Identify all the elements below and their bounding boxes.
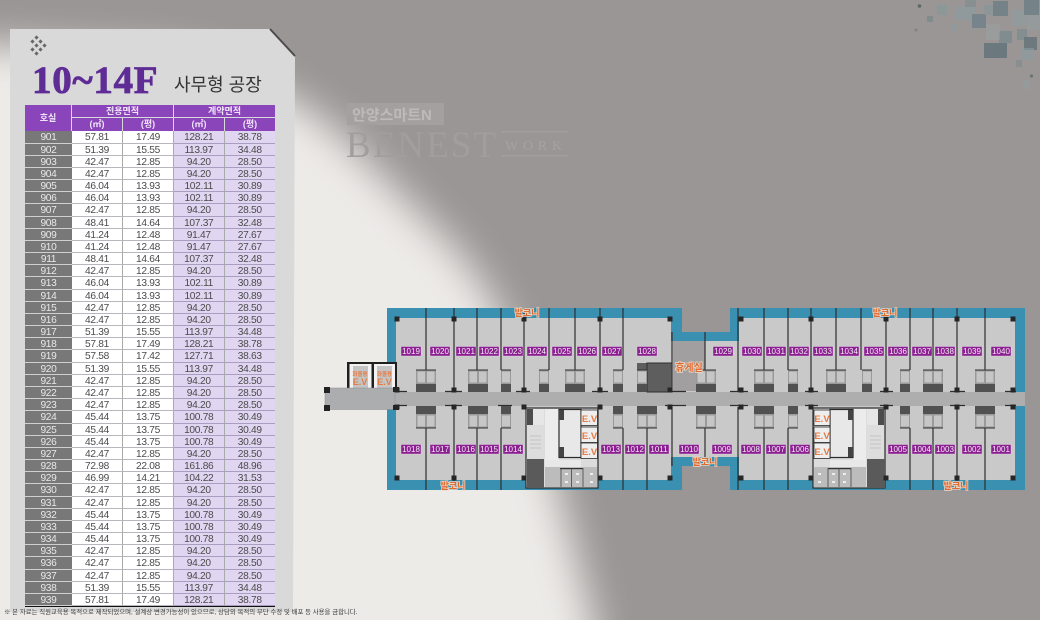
table rows: 935 xyxy=(40,546,57,557)
table rows: 927 xyxy=(40,449,57,460)
table rows: 46.04 xyxy=(85,278,109,289)
table rows: 921 xyxy=(40,376,57,387)
table rows: 12.85 xyxy=(136,169,160,180)
unit number badges upper: 1022 xyxy=(480,347,498,356)
unit number badges lower: 1010 xyxy=(680,445,698,454)
table rows: 17.49 xyxy=(136,339,160,350)
table rows: 28.50 xyxy=(238,205,262,216)
table rows: 46.04 xyxy=(85,193,109,204)
table rows: 42.47 xyxy=(85,400,109,411)
table rows: 28.50 xyxy=(238,485,262,496)
table rows: 161.86 xyxy=(184,461,213,472)
table rows: 42.47 xyxy=(85,315,109,326)
table rows: 934 xyxy=(40,534,57,545)
table rows: 22.08 xyxy=(136,461,160,472)
unit number badges lower: 1013 xyxy=(602,445,620,454)
table rows: 12.85 xyxy=(136,449,160,460)
table rows: 41.24 xyxy=(85,242,109,253)
table rows: 924 xyxy=(40,412,57,423)
core left xyxy=(526,408,598,488)
table rows: 30.89 xyxy=(238,278,262,289)
table rows: 12.48 xyxy=(136,242,160,253)
table rows: 902 xyxy=(40,145,57,156)
table rows: 12.85 xyxy=(136,303,160,314)
table rows: 94.20 xyxy=(187,449,211,460)
table rows: 28.50 xyxy=(238,266,262,277)
table rows: 94.20 xyxy=(187,485,211,496)
core right elevators: E.V xyxy=(814,447,830,458)
table rows: 57.81 xyxy=(85,339,109,350)
table rows: 929 xyxy=(40,473,57,484)
table rows: 12.85 xyxy=(136,400,160,411)
table rows: 34.48 xyxy=(238,583,262,594)
table rows: 100.78 xyxy=(184,437,213,448)
table rows: 94.20 xyxy=(187,558,211,569)
table rows: 30.89 xyxy=(238,291,262,302)
table rows: 906 xyxy=(40,193,57,204)
unit number badges upper: 1020 xyxy=(431,347,449,356)
table rows: 94.20 xyxy=(187,315,211,326)
unit number badges lower: 1015 xyxy=(480,445,498,454)
table rows: 30.49 xyxy=(238,534,262,545)
table rows: 34.48 xyxy=(238,145,262,156)
table header: 전용면적 xyxy=(106,106,139,116)
table rows: 94.20 xyxy=(187,498,211,509)
freight elevator block: E.V xyxy=(377,377,392,387)
table rows: 17.49 xyxy=(136,595,160,606)
table rows: 932 xyxy=(40,510,57,521)
panel: unit area table background xyxy=(10,29,295,612)
table rows: 94.20 xyxy=(187,169,211,180)
title: 10~14F xyxy=(32,59,158,102)
balcony and rest area labels: 발코니 xyxy=(944,480,968,491)
table rows: 30.49 xyxy=(238,437,262,448)
table rows: 46.99 xyxy=(85,473,109,484)
unit number badges upper: 1037 xyxy=(913,347,931,356)
table rows: 102.11 xyxy=(184,278,213,289)
unit number badges upper: 1019 xyxy=(402,347,420,356)
table rows: 94.20 xyxy=(187,157,211,168)
table rows: 42.47 xyxy=(85,303,109,314)
table rows: 45.44 xyxy=(85,510,109,521)
table rows: 939 xyxy=(40,595,57,606)
table rows: 113.97 xyxy=(184,145,213,156)
watermark logo xyxy=(346,103,568,166)
table rows: 938 xyxy=(40,583,57,594)
watermark logo: 안양스마트N xyxy=(352,107,432,124)
table rows: 104.22 xyxy=(184,473,213,484)
core left elevators: E.V xyxy=(582,431,598,442)
unit area table xyxy=(25,105,275,607)
partition walls xyxy=(397,308,1016,490)
unit number badges lower: 1003 xyxy=(936,445,954,454)
unit number badges upper: 1025 xyxy=(553,347,571,356)
table rows: 42.47 xyxy=(85,388,109,399)
freight elevator block xyxy=(324,362,399,411)
table rows: 918 xyxy=(40,339,57,350)
table rows: 42.47 xyxy=(85,449,109,460)
table rows: 27.67 xyxy=(238,242,262,253)
table rows: 13.93 xyxy=(136,193,160,204)
balcony and rest area labels: 발코니 xyxy=(515,307,539,318)
table rows: 28.50 xyxy=(238,315,262,326)
unit number badges upper: 1028 xyxy=(638,347,656,356)
table rows: 51.39 xyxy=(85,327,109,338)
table rows: 34.48 xyxy=(238,327,262,338)
table rows: 42.47 xyxy=(85,376,109,387)
table rows: 936 xyxy=(40,558,57,569)
table rows: 57.58 xyxy=(85,351,109,362)
table rows: 28.50 xyxy=(238,498,262,509)
table header: (㎡) xyxy=(192,119,206,129)
table rows: 34.48 xyxy=(238,364,262,375)
core left elevators xyxy=(581,410,598,458)
table rows: 17.42 xyxy=(136,351,160,362)
unit number badges upper: 1023 xyxy=(504,347,522,356)
balcony and rest area labels: 발코니 xyxy=(441,480,465,491)
table rows xyxy=(25,131,275,607)
table rows: 917 xyxy=(40,327,57,338)
table header xyxy=(25,105,275,131)
table rows: 127.71 xyxy=(184,351,213,362)
unit number badges lower: 1004 xyxy=(913,445,931,454)
unit number badges upper: 1038 xyxy=(936,347,954,356)
balcony and rest area labels xyxy=(441,307,968,491)
table rows: 107.37 xyxy=(184,218,213,229)
table rows: 94.20 xyxy=(187,571,211,582)
unit number badges lower: 1002 xyxy=(963,445,981,454)
table rows: 915 xyxy=(40,303,57,314)
freight elevator block: 화물용 xyxy=(352,370,368,378)
table rows: 922 xyxy=(40,388,57,399)
table rows: 102.11 xyxy=(184,193,213,204)
table rows: 48.41 xyxy=(85,218,109,229)
table rows: 15.55 xyxy=(136,327,160,338)
table rows: 94.20 xyxy=(187,400,211,411)
unit number badges upper: 1033 xyxy=(814,347,832,356)
table rows: 909 xyxy=(40,230,57,241)
table rows: 72.98 xyxy=(85,461,109,472)
table rows: 904 xyxy=(40,169,57,180)
pixel squares top right xyxy=(914,0,1040,89)
table rows: 12.85 xyxy=(136,315,160,326)
table rows: 38.78 xyxy=(238,132,262,143)
unit number badges lower: 1014 xyxy=(504,445,522,454)
table rows: 48.96 xyxy=(238,461,262,472)
table rows: 12.85 xyxy=(136,266,160,277)
table rows: 113.97 xyxy=(184,327,213,338)
table rows: 12.85 xyxy=(136,376,160,387)
table rows: 31.53 xyxy=(238,473,262,484)
table rows: 13.93 xyxy=(136,291,160,302)
table rows: 920 xyxy=(40,364,57,375)
table rows: 48.41 xyxy=(85,254,109,265)
unit number badges upper xyxy=(401,346,1011,356)
table rows: 910 xyxy=(40,242,57,253)
table rows: 30.49 xyxy=(238,412,262,423)
table rows: 12.85 xyxy=(136,571,160,582)
table rows: 42.47 xyxy=(85,498,109,509)
table rows: 914 xyxy=(40,291,57,302)
unit number badges upper: 1039 xyxy=(963,347,981,356)
table rows: 42.47 xyxy=(85,546,109,557)
balcony outline xyxy=(387,308,1025,490)
unit number badges lower: 1001 xyxy=(992,445,1010,454)
table rows: 42.47 xyxy=(85,157,109,168)
table rows: 45.44 xyxy=(85,534,109,545)
table rows: 13.75 xyxy=(136,437,160,448)
table rows: 13.75 xyxy=(136,534,160,545)
table rows: 102.11 xyxy=(184,291,213,302)
unit number badges lower: 1005 xyxy=(889,445,907,454)
icon: diamond pixel mark xyxy=(30,36,46,56)
balcony and rest area labels: 발코니 xyxy=(693,456,717,467)
watermark logo: WORK xyxy=(505,139,562,154)
table rows: 12.85 xyxy=(136,388,160,399)
rest area room xyxy=(673,341,705,391)
table rows: 916 xyxy=(40,315,57,326)
table rows: 15.55 xyxy=(136,145,160,156)
table rows: 14.64 xyxy=(136,254,160,265)
table rows: 128.21 xyxy=(184,595,213,606)
core right xyxy=(813,408,885,488)
table rows: 13.75 xyxy=(136,425,160,436)
table rows: 14.64 xyxy=(136,218,160,229)
table rows: 12.85 xyxy=(136,498,160,509)
table rows: 57.81 xyxy=(85,132,109,143)
balcony and rest area labels: 휴게실 xyxy=(675,361,703,374)
table rows: 905 xyxy=(40,181,57,192)
table rows: 28.50 xyxy=(238,400,262,411)
table rows: 45.44 xyxy=(85,522,109,533)
table rows: 28.50 xyxy=(238,546,262,557)
table rows: 13.93 xyxy=(136,181,160,192)
table rows: 42.47 xyxy=(85,266,109,277)
panel corner fold xyxy=(269,28,296,57)
table rows: 12.85 xyxy=(136,485,160,496)
unit number badges lower: 1017 xyxy=(431,445,449,454)
unit number badges lower: 1016 xyxy=(457,445,475,454)
table rows: 13.93 xyxy=(136,278,160,289)
table rows: 128.21 xyxy=(184,339,213,350)
table rows: 38.63 xyxy=(238,351,262,362)
table rows: 15.55 xyxy=(136,364,160,375)
table rows: 38.78 xyxy=(238,595,262,606)
table rows: 28.50 xyxy=(238,376,262,387)
core right elevators xyxy=(814,410,830,458)
freight elevator block: E.V xyxy=(353,377,367,387)
subtitle: 사무형 공장 xyxy=(174,75,262,95)
core left elevators: E.V xyxy=(582,447,598,458)
table rows: 32.48 xyxy=(238,218,262,229)
table rows: 12.85 xyxy=(136,546,160,557)
unit number badges lower: 1018 xyxy=(402,445,420,454)
table header: (㎡) xyxy=(90,119,104,129)
core right elevators: E.V xyxy=(814,431,830,442)
table rows: 51.39 xyxy=(85,145,109,156)
table rows: 45.44 xyxy=(85,437,109,448)
table header: (평) xyxy=(141,119,155,129)
table rows: 930 xyxy=(40,485,57,496)
unit number badges lower: 1006 xyxy=(791,445,809,454)
table rows: 42.47 xyxy=(85,558,109,569)
table rows: 913 xyxy=(40,278,57,289)
corridor xyxy=(393,392,1025,406)
table rows: 91.47 xyxy=(187,230,211,241)
table header: 호실 xyxy=(40,113,56,123)
table rows: 46.04 xyxy=(85,291,109,302)
table rows: 94.20 xyxy=(187,376,211,387)
table rows: 42.47 xyxy=(85,571,109,582)
table rows: 901 xyxy=(40,132,57,143)
table rows: 30.49 xyxy=(238,522,262,533)
table rows: 32.48 xyxy=(238,254,262,265)
table rows: 12.85 xyxy=(136,558,160,569)
table rows: 51.39 xyxy=(85,364,109,375)
floor area xyxy=(396,318,1015,480)
unit number badges lower: 1007 xyxy=(767,445,785,454)
unit number badges upper: 1035 xyxy=(865,347,883,356)
table rows: 91.47 xyxy=(187,242,211,253)
unit number badges lower: 1011 xyxy=(650,445,668,454)
table header: (평) xyxy=(243,119,257,129)
table rows: 30.49 xyxy=(238,425,262,436)
table rows: 102.11 xyxy=(184,181,213,192)
table rows: 51.39 xyxy=(85,583,109,594)
table rows: 912 xyxy=(40,266,57,277)
table rows: 27.67 xyxy=(238,230,262,241)
table rows: 100.78 xyxy=(184,510,213,521)
table rows: 928 xyxy=(40,461,57,472)
table rows: 923 xyxy=(40,400,57,411)
freight elevator block: 화물용 xyxy=(377,370,392,378)
table rows: 28.50 xyxy=(238,449,262,460)
table rows: 100.78 xyxy=(184,522,213,533)
table rows: 911 xyxy=(41,254,56,265)
table rows: 12.48 xyxy=(136,230,160,241)
storage room beside 1028 xyxy=(637,363,672,392)
table rows: 30.89 xyxy=(238,181,262,192)
unit number badges upper: 1029 xyxy=(714,347,732,356)
table rows: 45.44 xyxy=(85,412,109,423)
table rows: 57.81 xyxy=(85,595,109,606)
table rows: 28.50 xyxy=(238,303,262,314)
table rows: 94.20 xyxy=(187,266,211,277)
table rows: 28.50 xyxy=(238,558,262,569)
table rows: 42.47 xyxy=(85,485,109,496)
table rows: 107.37 xyxy=(184,254,213,265)
table rows: 933 xyxy=(40,522,57,533)
table rows: 38.78 xyxy=(238,339,262,350)
table rows: 931 xyxy=(40,498,57,509)
core right elevators: E.V xyxy=(814,414,830,425)
table rows: 925 xyxy=(40,425,57,436)
table rows: 100.78 xyxy=(184,425,213,436)
table rows: 17.49 xyxy=(136,132,160,143)
footnote: ※ 본 자료는 직원교육용 목적으로 제작되었으며, 설계상 변경가능성이 있으므로, 상담외 목적의 무단 수정 및 배포 등 사용을 금합니다. xyxy=(4,609,358,616)
table rows: 13.75 xyxy=(136,510,160,521)
unit number badges upper: 1040 xyxy=(992,347,1010,356)
table rows: 94.20 xyxy=(187,388,211,399)
table rows: 14.21 xyxy=(136,473,160,484)
table rows: 12.85 xyxy=(136,157,160,168)
table rows: 937 xyxy=(40,571,57,582)
table rows: 113.97 xyxy=(184,364,213,375)
table rows: 28.50 xyxy=(238,388,262,399)
unit number badges lower: 1009 xyxy=(713,445,731,454)
table rows: 28.50 xyxy=(238,571,262,582)
table rows: 46.04 xyxy=(85,181,109,192)
table header: 계약면적 xyxy=(208,106,241,116)
table rows: 908 xyxy=(40,218,57,229)
table rows: 28.50 xyxy=(238,169,262,180)
unit number badges upper: 1030 xyxy=(743,347,761,356)
table rows: 30.89 xyxy=(238,193,262,204)
table rows: 919 xyxy=(40,351,57,362)
unit number badges upper: 1021 xyxy=(457,347,475,356)
table rows: 94.20 xyxy=(187,546,211,557)
table rows: 13.75 xyxy=(136,412,160,423)
unit number badges upper: 1031 xyxy=(767,347,785,356)
table rows: 94.20 xyxy=(187,205,211,216)
table rows: 41.24 xyxy=(85,230,109,241)
core left elevators: E.V xyxy=(582,414,598,425)
unit number badges upper: 1032 xyxy=(790,347,808,356)
table rows: 28.50 xyxy=(238,157,262,168)
unit number badges upper: 1036 xyxy=(889,347,907,356)
unit number badges upper: 1034 xyxy=(840,347,858,356)
unit number badges upper: 1026 xyxy=(578,347,596,356)
table rows: 100.78 xyxy=(184,412,213,423)
structural columns xyxy=(394,316,1016,480)
table rows: 926 xyxy=(40,437,57,448)
table rows: 30.49 xyxy=(238,510,262,521)
watermark logo: BENEST xyxy=(346,125,496,166)
unit number badges upper: 1027 xyxy=(603,347,621,356)
unit number badges upper: 1024 xyxy=(528,347,546,356)
table rows: 12.85 xyxy=(136,205,160,216)
table rows: 15.55 xyxy=(136,583,160,594)
table rows: 100.78 xyxy=(184,534,213,545)
wet units upper row xyxy=(416,370,995,392)
table rows: 113.97 xyxy=(184,583,213,594)
balcony and rest area labels: 발코니 xyxy=(873,307,897,318)
unit number badges lower: 1012 xyxy=(626,445,644,454)
wet units lower row xyxy=(416,406,995,428)
table rows: 13.75 xyxy=(136,522,160,533)
table rows: 907 xyxy=(40,205,57,216)
table rows: 42.47 xyxy=(85,169,109,180)
unit number badges lower: 1008 xyxy=(742,445,760,454)
table rows: 45.44 xyxy=(85,425,109,436)
table rows: 42.47 xyxy=(85,205,109,216)
unit number badges lower xyxy=(401,444,1011,454)
table rows: 94.20 xyxy=(187,303,211,314)
table rows: 903 xyxy=(40,157,57,168)
table rows: 128.21 xyxy=(184,132,213,143)
